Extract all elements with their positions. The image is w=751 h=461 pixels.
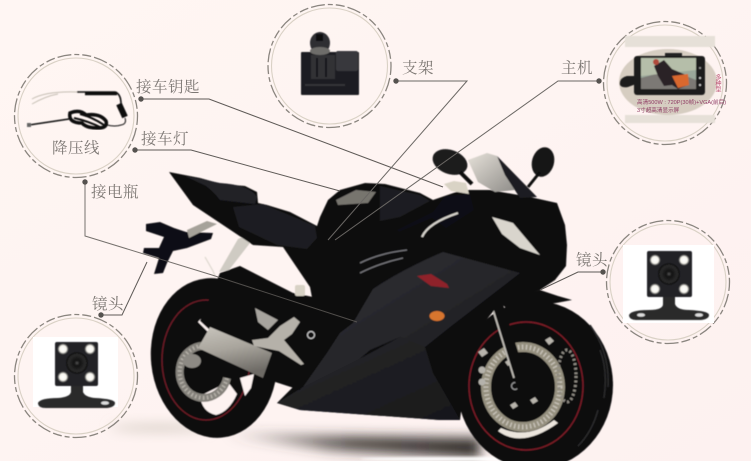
fuel tank [336, 186, 430, 273]
label: right lens: 镜头 [576, 251, 608, 269]
line end dots [82, 78, 606, 318]
front fender [498, 290, 572, 313]
tail and seat [185, 176, 317, 249]
headlight [492, 217, 540, 255]
panel: host [604, 22, 726, 144]
exhaust [198, 327, 307, 390]
icon: dash camera [620, 53, 705, 95]
icon: camera [38, 342, 115, 408]
line: bracket [328, 81, 467, 240]
line: battery [85, 182, 357, 322]
ground shadow [110, 425, 560, 461]
line: host [335, 81, 599, 240]
icon: cable [27, 92, 126, 128]
label: connect to battery: 接电瓶 [91, 183, 139, 201]
label: reducer: 降压线 [52, 139, 100, 157]
small red caption: 多种型 [714, 73, 721, 92]
rear bracket and tail light [143, 221, 250, 276]
red decal [417, 274, 449, 288]
main silhouette: tail, tank, frame [169, 172, 567, 420]
line: lamp [135, 150, 340, 191]
rear wheel [143, 272, 285, 444]
label: connect to lamp: 接车灯 [141, 130, 189, 148]
windshield [468, 153, 537, 198]
label: bracket: 支架 [402, 59, 434, 77]
small red caption [637, 73, 726, 114]
lower fairing [277, 337, 460, 420]
footrest and heat shield [252, 285, 314, 365]
panel: left lens [14, 314, 138, 438]
small red caption: 3寸超高清显示屏 [637, 106, 680, 114]
front wheel [457, 296, 613, 461]
line: right lens [540, 272, 603, 290]
labels [91, 59, 608, 313]
label: left lens: 镜头 [92, 295, 124, 313]
panel: bracket [268, 4, 391, 128]
label: connect to key: 接车钥匙 [136, 78, 200, 96]
icon: camera [629, 251, 709, 320]
label: host: 主机 [561, 59, 593, 77]
indicator light [430, 311, 444, 321]
swingarm and frame [200, 266, 328, 388]
motorcycle [143, 145, 613, 461]
line: key [141, 99, 443, 187]
line: left lens [101, 262, 147, 315]
image background [619, 36, 717, 123]
mirrors [429, 145, 558, 187]
side fairing panel [303, 252, 520, 387]
small red caption: 高清500W : 720P(30帧)+VGA(前后) [637, 98, 726, 106]
handlebar and lever [397, 181, 474, 237]
leader lines [85, 81, 603, 322]
icon: bracket [301, 32, 359, 95]
panel: right lens [606, 220, 730, 344]
panel: voltage reducer cable [14, 54, 138, 178]
